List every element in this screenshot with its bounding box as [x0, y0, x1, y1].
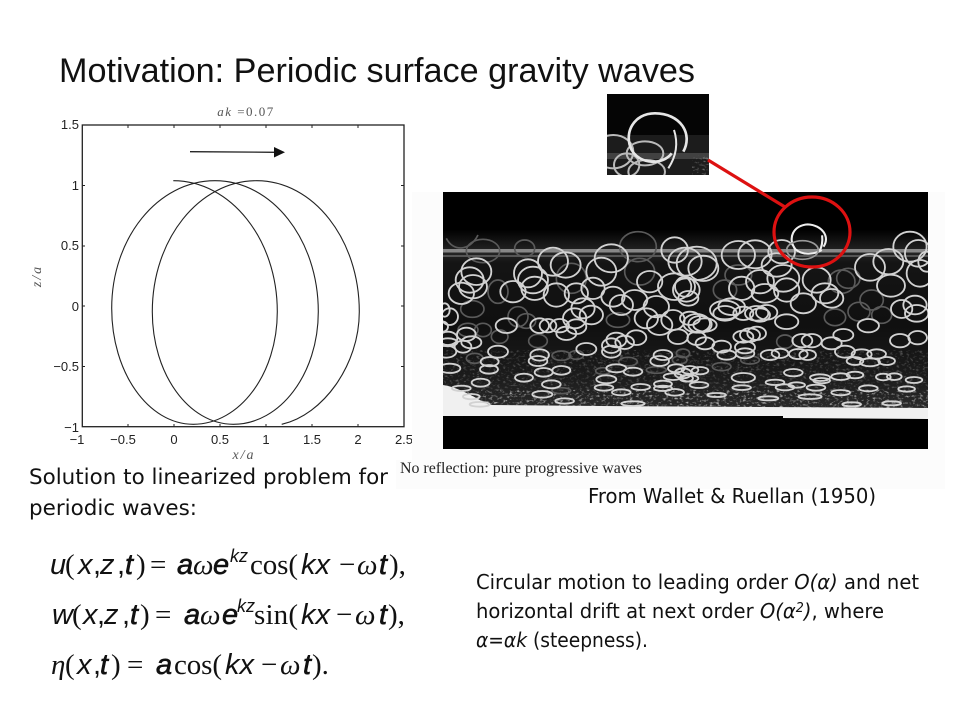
equation u: t	[379, 549, 389, 581]
equation w: a	[184, 599, 200, 631]
plot frame	[82, 125, 404, 427]
equation eta: η	[51, 649, 65, 681]
photo dark field	[436, 192, 935, 449]
equation w: e	[222, 599, 238, 631]
equation u: ω	[357, 549, 377, 581]
equation u: x	[76, 549, 94, 581]
equation eta: kx	[225, 649, 256, 681]
equation w: −	[336, 599, 352, 631]
y axis label: z/a	[30, 265, 45, 288]
chart: particle trajectory plot	[30, 104, 413, 463]
y axis tick labels: 1	[72, 178, 79, 193]
text: photo source: From Wallet & Ruellan (1950)	[588, 484, 876, 508]
arrow: drift direction	[190, 147, 285, 158]
equation w: =	[155, 599, 171, 631]
particle orbit rings, left half	[436, 232, 700, 407]
x axis tick labels: −1	[70, 432, 84, 447]
x axis tick labels: 2	[354, 432, 362, 447]
equation eta: ,	[93, 649, 101, 681]
equation u: e	[213, 549, 229, 581]
y axis tick labels: 0.5	[61, 238, 79, 253]
equation w: ,	[122, 599, 130, 631]
chart title: ak =0.07	[217, 104, 275, 119]
equation: velocity and elevation solutions	[50, 546, 406, 681]
equation u: ),	[389, 549, 406, 581]
equation u: cos(	[250, 549, 298, 581]
equation w: w	[52, 599, 75, 631]
equation eta: −	[261, 649, 277, 681]
equation u: )	[136, 549, 146, 581]
equation u: (	[65, 549, 75, 581]
text: solution description: periodic waves:	[29, 496, 197, 520]
y axis tick labels: 1.5	[61, 117, 79, 132]
equation u: kz	[230, 546, 248, 566]
highlighted orbit	[787, 224, 826, 259]
y axis tick labels	[53, 117, 79, 435]
equation u: −	[339, 549, 355, 581]
equation eta: )	[111, 649, 121, 681]
text: circular motion explanation: α=αk (steepness).	[476, 628, 648, 652]
equation u: kx	[301, 549, 332, 581]
text: circular motion explanation: )	[802, 599, 812, 623]
equation eta: cos(	[174, 649, 222, 681]
equation u: ,	[117, 549, 125, 581]
inset: magnified orbit	[607, 94, 709, 175]
equation w: kx	[301, 599, 332, 631]
equation u: a	[177, 549, 193, 581]
photo caption: No reflection: pure progressive waves	[400, 460, 642, 477]
x axis tick labels: 1.5	[303, 432, 321, 447]
axis ticks	[82, 125, 404, 427]
equation eta: ).	[312, 649, 329, 681]
equation eta: t	[100, 649, 110, 681]
x axis tick labels: 0.5	[211, 432, 229, 447]
y axis tick labels: −0.5	[53, 359, 79, 374]
equation u: z	[99, 549, 115, 581]
text: circular motion explanation	[476, 570, 919, 652]
x axis tick labels: 0	[170, 432, 178, 447]
equation w: z	[103, 599, 119, 631]
trajectory curve	[112, 181, 359, 424]
x axis tick labels: 1	[262, 432, 270, 447]
text: circular motion explanation: 2	[796, 601, 804, 616]
equation eta: =	[127, 649, 143, 681]
equation w: t	[130, 599, 140, 631]
photo paper background	[396, 192, 945, 489]
particle orbit rings, right half	[668, 232, 935, 406]
equation u: t	[125, 549, 135, 581]
title: Motivation: Periodic surface gravity waves	[59, 52, 695, 90]
callout: red circle and connector	[708, 160, 850, 267]
photo panel: particle orbits	[412, 192, 928, 449]
y axis tick labels: −1	[64, 420, 79, 435]
equation w: kz	[237, 596, 255, 616]
equation u: ,	[93, 549, 101, 581]
text: circular motion explanation: Circular motion to leading order O(α) and net	[476, 570, 919, 594]
equation u: ω	[193, 549, 213, 581]
equation w: ω	[355, 599, 375, 631]
text: circular motion explanation: horizontal drift at next order O(α	[476, 599, 797, 623]
equation w: x	[81, 599, 99, 631]
equation w: sin(	[254, 599, 298, 631]
equation eta: a	[156, 649, 172, 681]
x axis label: x/a	[231, 448, 256, 463]
equation w: (	[72, 599, 82, 631]
x axis tick labels: 2.5	[395, 432, 413, 447]
x axis tick labels	[70, 432, 413, 447]
equation u: u	[50, 549, 66, 581]
equation w: t	[379, 599, 389, 631]
equation eta: x	[75, 649, 93, 681]
equation eta: t	[303, 649, 313, 681]
equation eta: (	[65, 649, 75, 681]
text: circular motion explanation: , where	[812, 599, 886, 623]
equation u: =	[150, 549, 166, 581]
y axis tick labels: 0	[72, 299, 79, 314]
text: solution description	[29, 465, 388, 520]
equation w: )	[140, 599, 150, 631]
equation w: ),	[388, 599, 405, 631]
x axis tick labels: −0.5	[110, 432, 136, 447]
equation w: ,	[97, 599, 105, 631]
equation w: ω	[200, 599, 220, 631]
text: solution description: Solution to linearized problem for	[29, 465, 388, 489]
equation eta: ω	[280, 649, 300, 681]
